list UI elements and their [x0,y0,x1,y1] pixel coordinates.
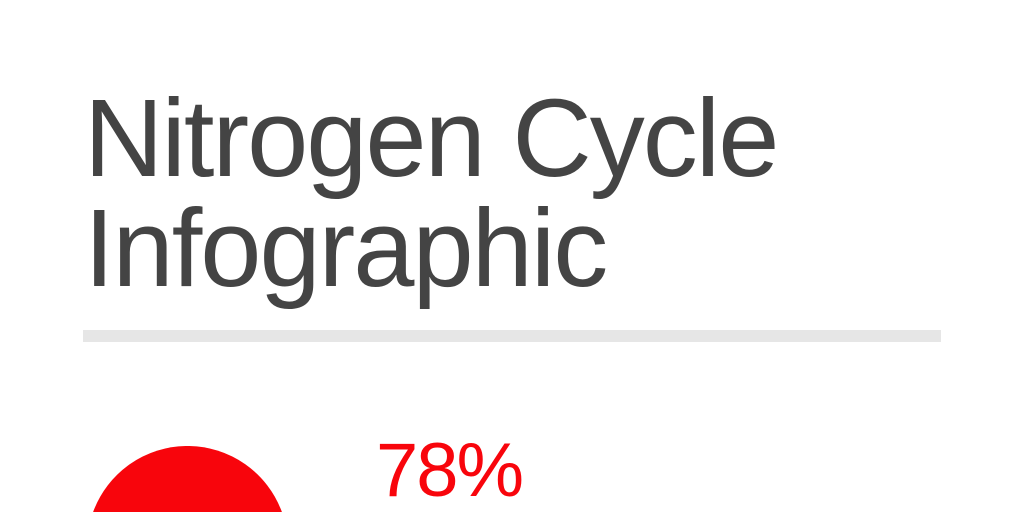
title [84,77,777,310]
title: Nitrogen Cycle [84,77,777,200]
stat: 78%: 78% [376,428,522,512]
icon: red circle [93,446,282,512]
title: Infographic [84,187,606,310]
